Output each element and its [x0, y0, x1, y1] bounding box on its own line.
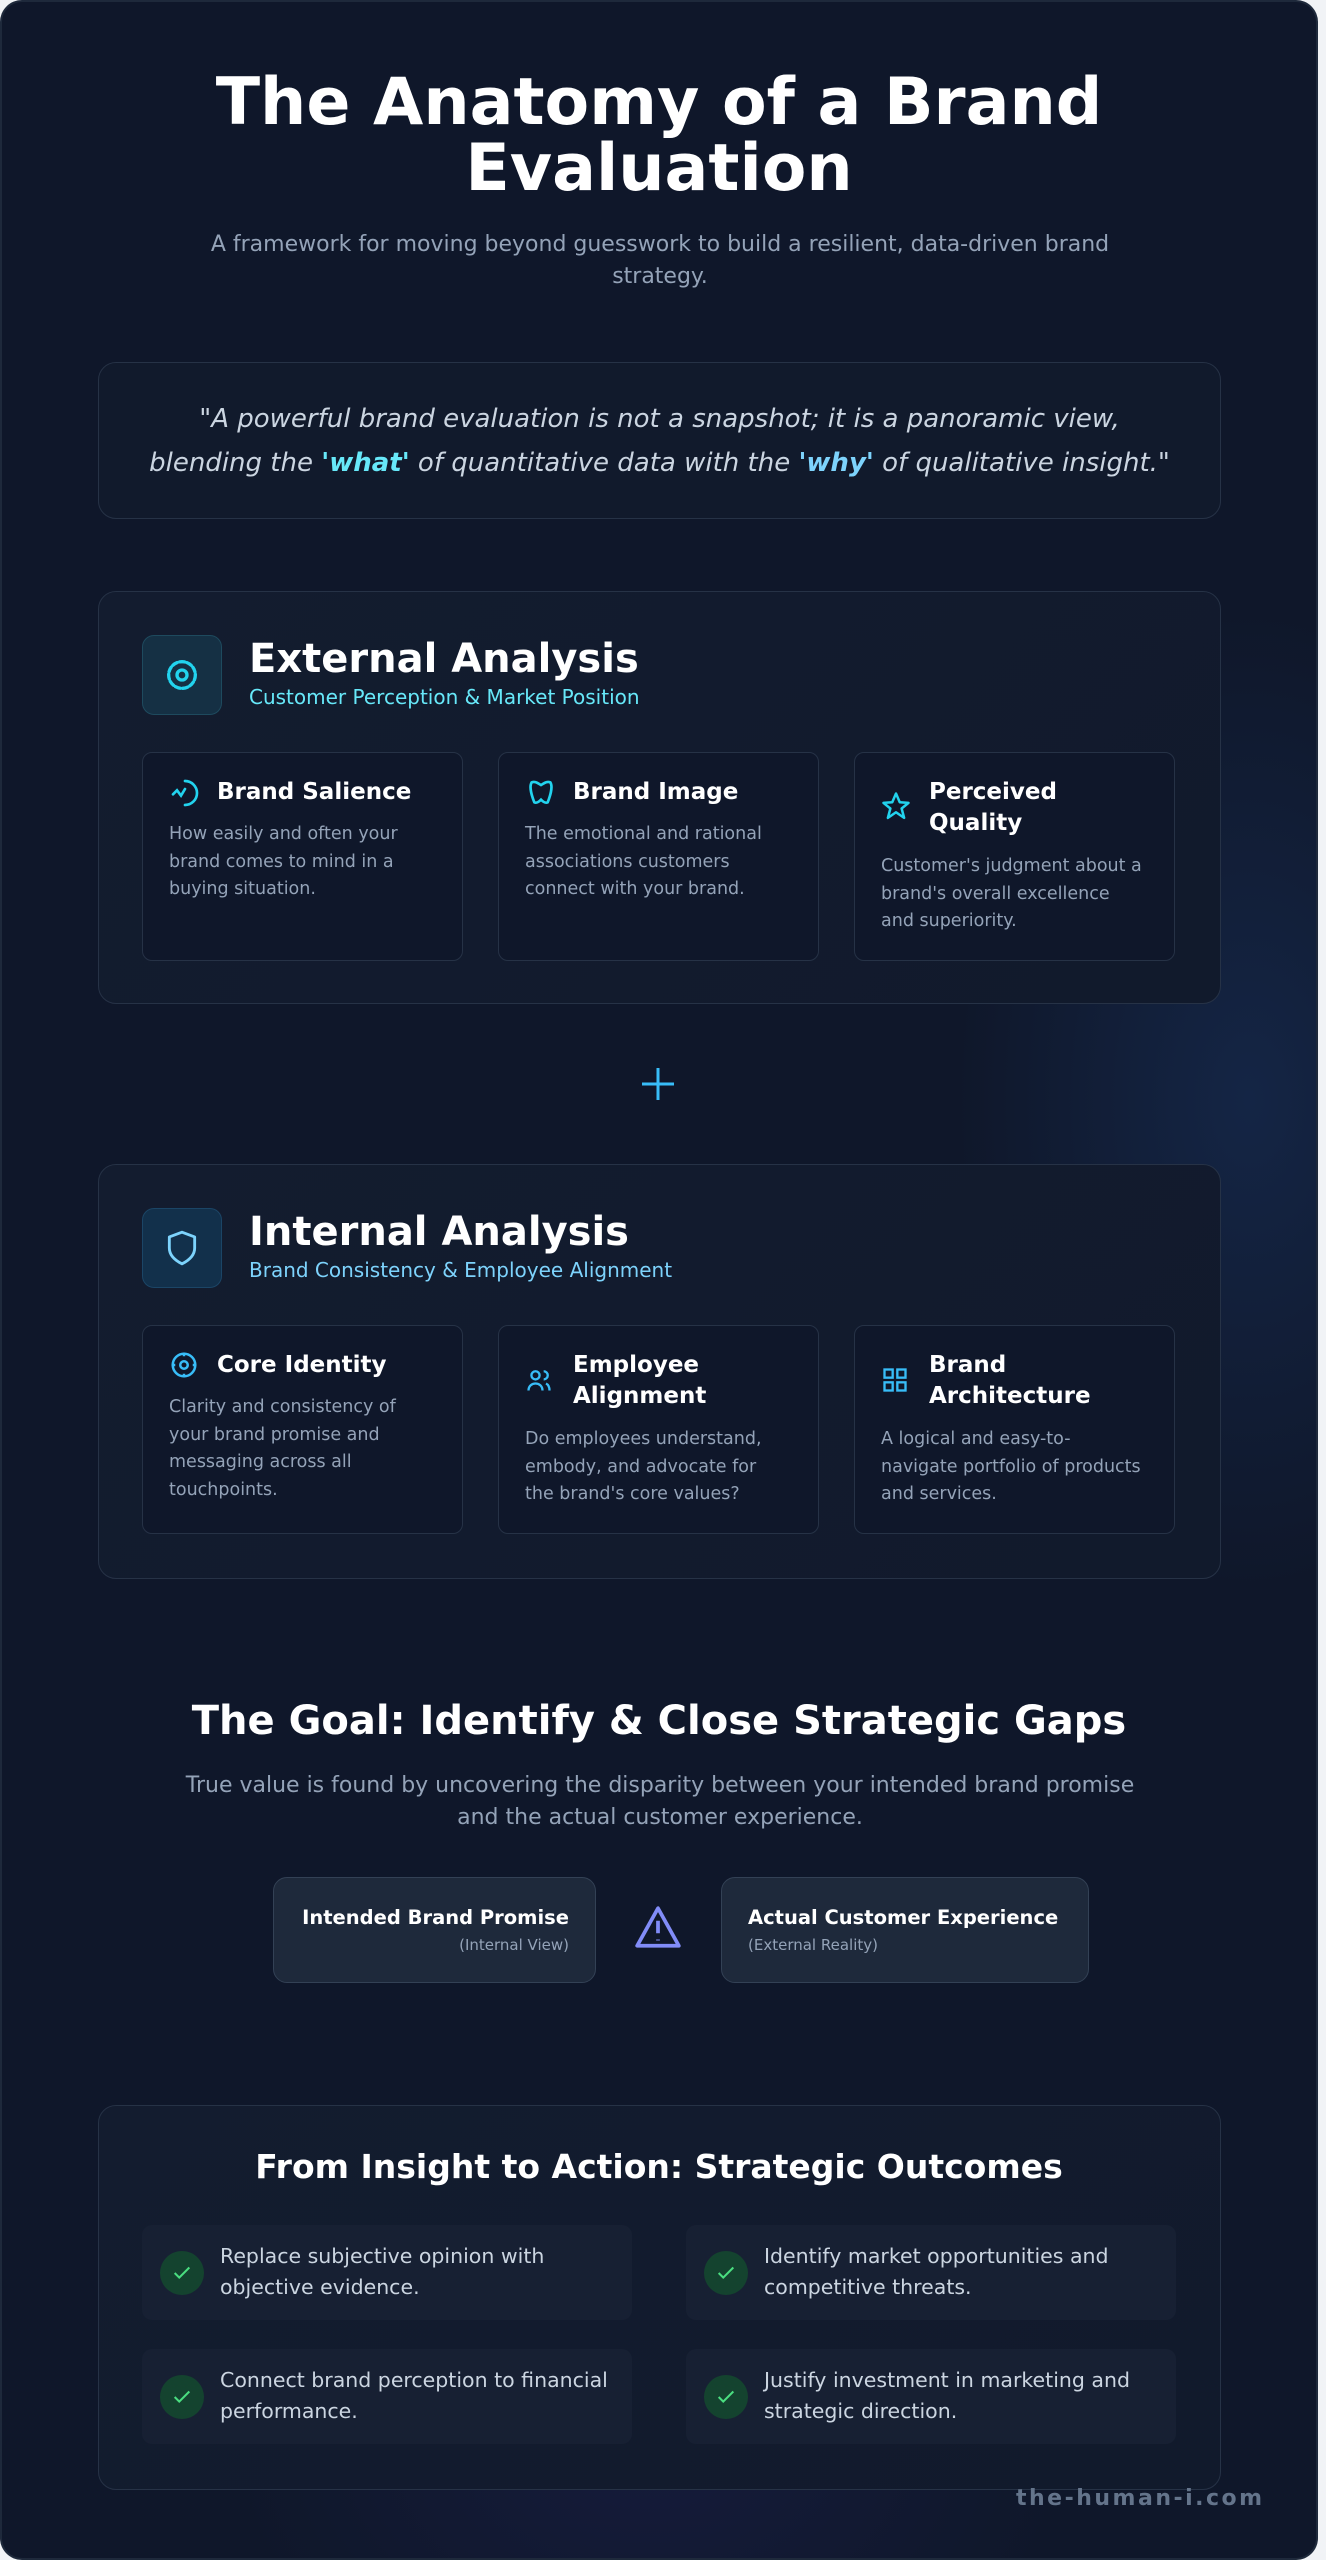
heading: internal: Internal Analysis — [249, 1209, 629, 1255]
outcome 3 — [142, 2349, 632, 2444]
icon: warning — [635, 1906, 681, 1948]
quote callout — [98, 362, 1221, 519]
quote callout: "A powerful brand evaluation is not a snapshot; it is a panoramic view, — [199, 404, 1120, 434]
card: brand architecture — [854, 1325, 1175, 1534]
subheading: internal: Brand Consistency & Employee Alignment — [249, 1258, 672, 1282]
icon: heart — [529, 780, 553, 804]
title: The Anatomy of a Brand — [216, 65, 1102, 140]
icon: external — [142, 635, 222, 715]
card: perceived quality: Customer's judgment about a brand's overall excellence and superiority. — [881, 856, 1142, 931]
text: goal description: True value is found by uncovering the disparity between your intended brand promise and the actual customer experience. — [186, 1773, 1134, 1830]
icon: plus — [642, 1068, 674, 1100]
icon: grid — [883, 1368, 907, 1392]
card: employee alignment: Employee Alignment — [573, 1352, 706, 1409]
outcome 2 — [686, 2225, 1176, 2320]
subtitle: A framework for moving beyond guesswork to build a resilient, data-driven brand strategy. — [211, 232, 1109, 289]
card: core identity — [142, 1325, 463, 1534]
box: intended brand promise: Intended Brand Promise — [302, 1906, 569, 1929]
card: brand image: Brand Image — [573, 779, 738, 805]
outcome 4 — [686, 2349, 1176, 2444]
card: perceived quality: Perceived Quality — [929, 779, 1057, 836]
card: brand architecture: Brand Architecture — [929, 1352, 1091, 1409]
box: actual customer experience — [721, 1877, 1089, 1983]
heading: outcomes: From Insight to Action: Strategic Outcomes — [255, 2147, 1063, 2186]
box: actual customer experience: (External Reality) — [748, 1936, 878, 1954]
outcome 4: Justify investment in marketing and strategic direction. — [764, 2368, 1130, 2423]
quote callout: blending the 'what' of quantitative data with the 'why' of qualitative insight." — [149, 448, 1170, 478]
icon: users — [527, 1370, 551, 1390]
icon: shield — [142, 1208, 222, 1288]
icon: star — [882, 792, 910, 820]
card: perceived quality — [854, 752, 1175, 961]
panel: strategic outcomes — [98, 2105, 1221, 2490]
card: brand salience: Brand Salience — [217, 779, 411, 805]
title: Evaluation — [465, 131, 853, 206]
box: intended brand promise — [273, 1877, 596, 1983]
title — [216, 65, 1102, 206]
subheading: external: Customer Perception & Market Position — [249, 685, 640, 709]
card: brand image — [498, 752, 819, 961]
card: brand salience: How easily and often your brand comes to mind in a buying situation. — [169, 824, 398, 899]
panel: external analysis — [98, 591, 1221, 1004]
box: actual customer experience: Actual Customer Experience — [748, 1906, 1058, 1929]
card: brand image: The emotional and rational associations customers connect with your brand. — [525, 824, 762, 899]
icon: target — [172, 1352, 196, 1378]
box: intended brand promise: (Internal View) — [459, 1936, 569, 1954]
card: brand architecture: A logical and easy-to-navigate portfolio of products and services. — [881, 1429, 1141, 1504]
icon: pulse — [172, 780, 198, 806]
outcome 1 — [142, 2225, 632, 2320]
card: employee alignment: Do employees understand, embody, and advocate for the brand's core values? — [525, 1429, 762, 1504]
card: employee alignment — [498, 1325, 819, 1534]
heading: external: External Analysis — [249, 636, 639, 682]
outcome 3: Connect brand perception to financial performance. — [220, 2368, 608, 2423]
panel: internal analysis — [98, 1164, 1221, 1579]
card: core identity: Clarity and consistency of your brand promise and messaging across all touchpoints. — [169, 1397, 396, 1500]
card: core identity: Core Identity — [217, 1352, 386, 1378]
heading: goal: The Goal: Identify & Close Strategic Gaps — [192, 1698, 1126, 1744]
card: brand salience — [142, 752, 463, 961]
outcome 1: Replace subjective opinion with objective evidence. — [220, 2244, 544, 2299]
outcome 2: Identify market opportunities and competitive threats. — [764, 2244, 1109, 2299]
footer: watermark: the-human-i.com — [1016, 2486, 1265, 2511]
